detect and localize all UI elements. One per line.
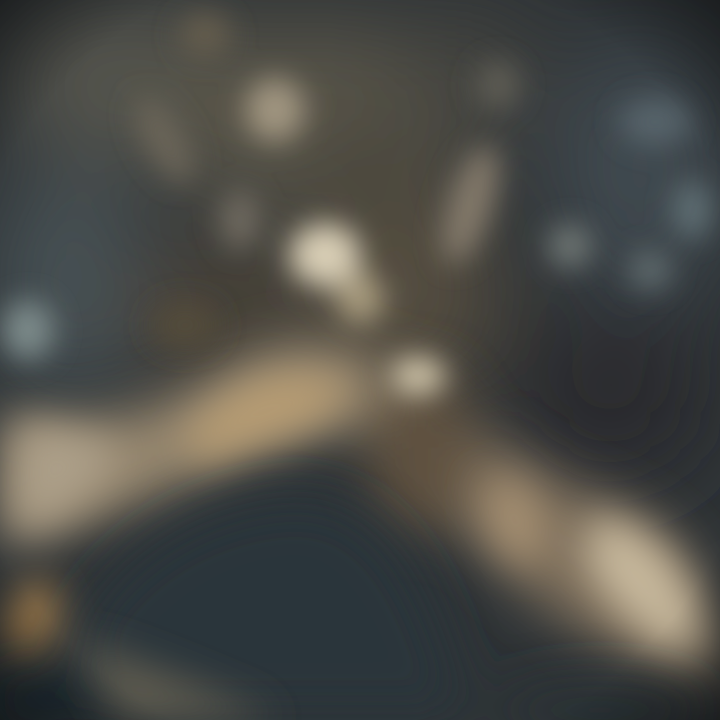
dark arch <box>0 495 710 720</box>
haze: cool and warm tones <box>0 0 720 480</box>
lower warm ribbons <box>0 343 720 690</box>
ribbon highlights <box>0 375 705 720</box>
upper light blobs <box>2 13 712 396</box>
